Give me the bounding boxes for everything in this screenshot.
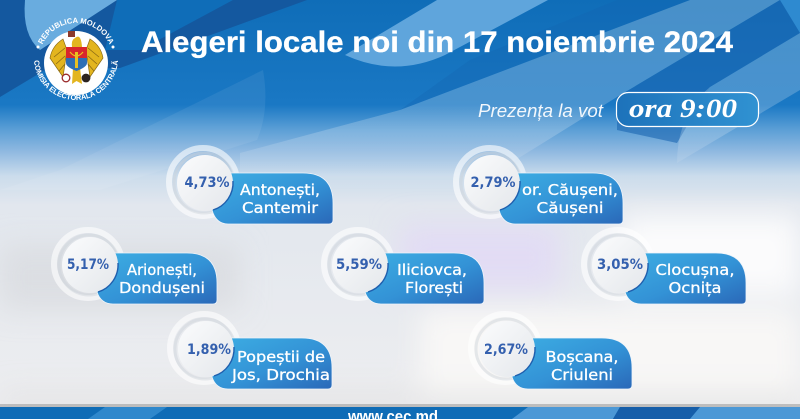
card: Ilicovca: 5,59% [336, 257, 382, 273]
card: Clocușna: Ocnița [668, 279, 722, 297]
card: Arionești: 5,17% [67, 257, 109, 273]
logo: Comisia Electorală Centrală: COMISIA ELECTORALĂ CENTRALĂ [34, 60, 118, 100]
card: Clocușna: Clocușna, [656, 261, 734, 279]
card: Arionești: Arionești, [127, 261, 197, 279]
card: Boșcana: 2,67% [484, 342, 528, 358]
card: Arionești: Dondușeni [119, 279, 205, 297]
card: Clocușna [584, 230, 746, 304]
subtitle: Prezența la vot: Prezența la vot [478, 101, 604, 121]
footer bar [0, 404, 800, 419]
card: Popeștii de Jos: 1,89% [187, 342, 231, 358]
card: Boșcana: Criuleni [551, 366, 613, 384]
card: Arionești [54, 230, 217, 304]
card: Ilicovca: Florești [405, 279, 463, 297]
card: Boșcana [471, 314, 632, 389]
card: Căușeni: or. Căușeni, [522, 181, 618, 199]
card: Antonești [169, 148, 333, 224]
card: Popeștii de Jos: Popeștii de [237, 348, 325, 366]
icon: eagle coat of arms [50, 31, 103, 84]
logo ring text: REPUBLICA MOLDOVA [38, 18, 114, 44]
card: Ilicovca: Iliciovca, [397, 261, 467, 279]
card: Popeștii de Jos: Jos, Drochia [231, 366, 330, 384]
card: Căușeni [456, 148, 623, 224]
card: Antonești: 4,73% [184, 175, 230, 191]
card: Popeștii de Jos [170, 314, 332, 389]
card: Căușeni: 2,79% [470, 175, 516, 191]
card: Antonești: Antonești, [240, 181, 320, 199]
card: Clocușna: 3,05% [597, 257, 643, 273]
card: Căușeni: Căușeni [536, 199, 604, 217]
logo: Comisia Electorală Centrală [34, 18, 118, 100]
title: Alegeri locale noi din 17 noiembrie 2024 [141, 26, 733, 59]
time badge: ora 9:00: ora 9:00 [629, 94, 737, 123]
card: Antonești: Cantemir [242, 199, 319, 217]
card: Ilicovca [324, 230, 484, 304]
card: Boșcana: Boșcana, [546, 348, 618, 366]
time badge: ora 9:00 [616, 92, 758, 126]
